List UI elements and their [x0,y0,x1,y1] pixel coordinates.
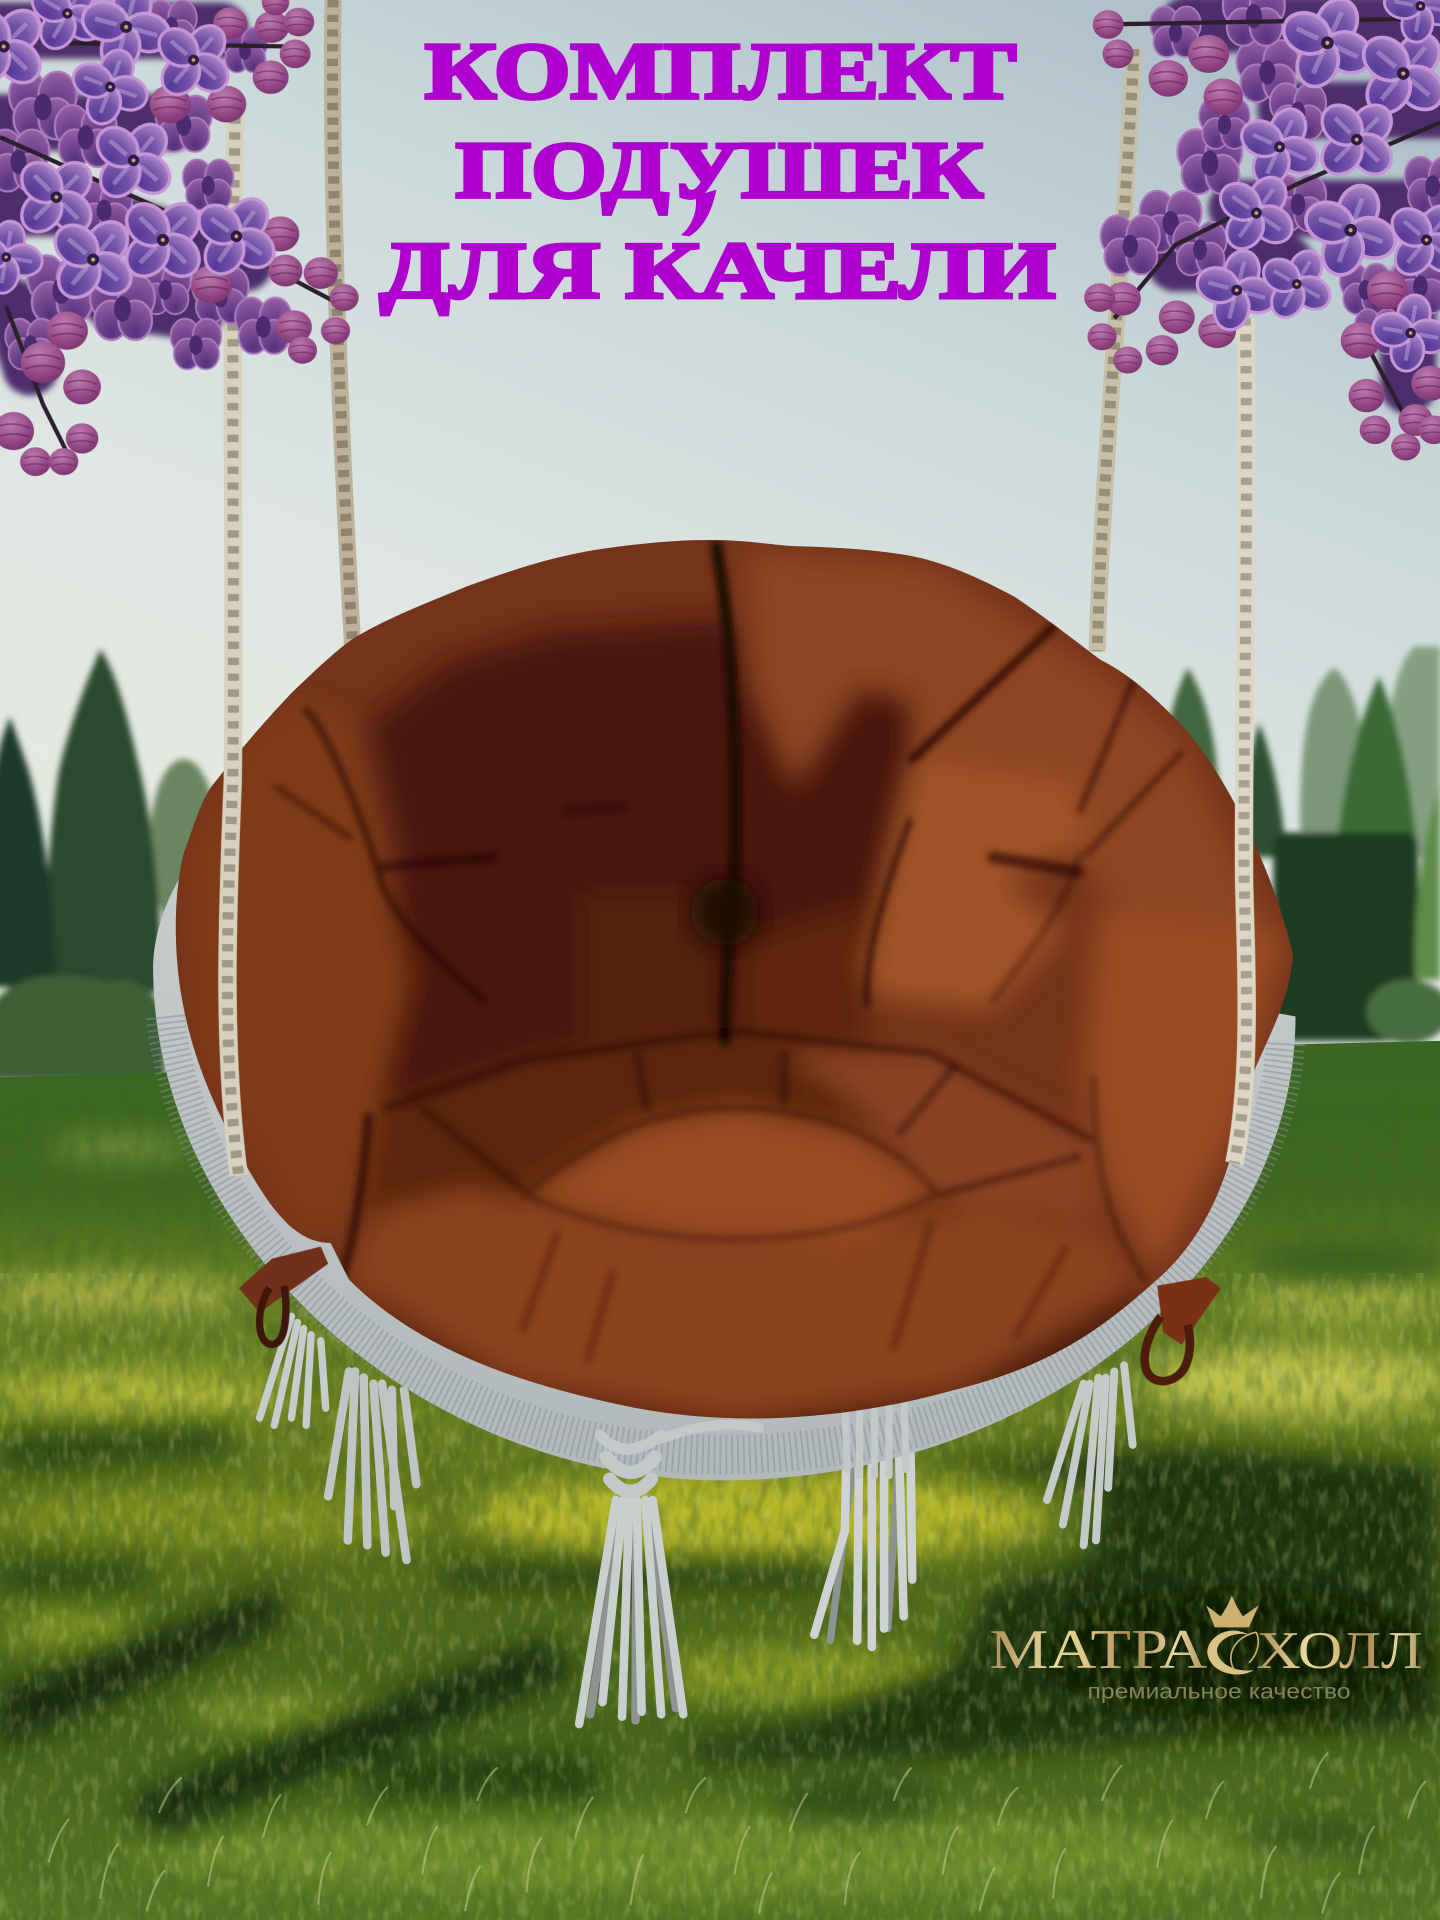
cushion tone masses [184,551,1286,1457]
lawn [0,1041,1440,1920]
lawn: light texture [0,1273,1440,1920]
tassel: far left [260,1316,326,1425]
title line 1: КОМПЛЕКТ [425,27,1016,116]
left branch half-open blossoms [0,0,291,369]
distant trees [0,647,1440,1080]
left branch foliage base [0,31,245,367]
sky background [0,0,1440,1102]
button tuft [691,878,759,947]
logo emblem: crown and crescent [1206,1596,1259,1675]
left branch stems [0,43,343,453]
title line 2: ПОДУШЕК [456,126,983,215]
rope: left front [227,116,239,1176]
right tie [1145,1277,1221,1381]
cushion shading [184,546,1286,1457]
rope: right front [1234,318,1247,1163]
front ropes [227,116,1247,1176]
logo wordmark right: ХОЛЛ [1256,1622,1423,1680]
left tie [239,1247,328,1344]
lilac branch right [1084,0,1440,460]
lawn: sunlit patches [0,1140,1440,1897]
ring rope texture [165,1016,1286,1455]
title line 3: ДЛЯ КАЧЕЛИ [380,227,1056,316]
right branch blossoms [1187,0,1440,378]
dark creases [277,546,1180,1359]
left branch buds [0,0,359,476]
cushion ties [239,1247,1221,1381]
logo [989,1596,1423,1703]
right branch buds [1084,10,1440,460]
fringe tassels [260,1316,1133,1724]
tassel: centre knot [579,1500,683,1724]
lawn: foreground blades [49,1753,1425,1913]
logo wordmark left: МАТРА [989,1619,1208,1681]
brown cushion [176,540,1293,1457]
right branch half-open blossoms [1101,0,1440,354]
tassel: far right [1047,1365,1133,1545]
right branch foliage base [1176,24,1440,386]
tassel: left [328,1371,416,1560]
tassel: right centre [814,1396,912,1647]
logo tagline: премиальное качество [1087,1680,1351,1703]
lilac branch left [0,0,359,476]
chair frame ring [153,857,1296,1480]
macrame knots over ring [600,1391,906,1491]
right trees [1163,647,1440,1043]
left branch blossoms [0,0,295,322]
left trees [0,649,218,1080]
title [380,27,1056,316]
right branch stems [1102,18,1440,422]
lawn: shadows [0,1247,1440,1851]
back ropes behind chair [333,0,1134,651]
lawn: blade texture [0,1102,1440,1920]
